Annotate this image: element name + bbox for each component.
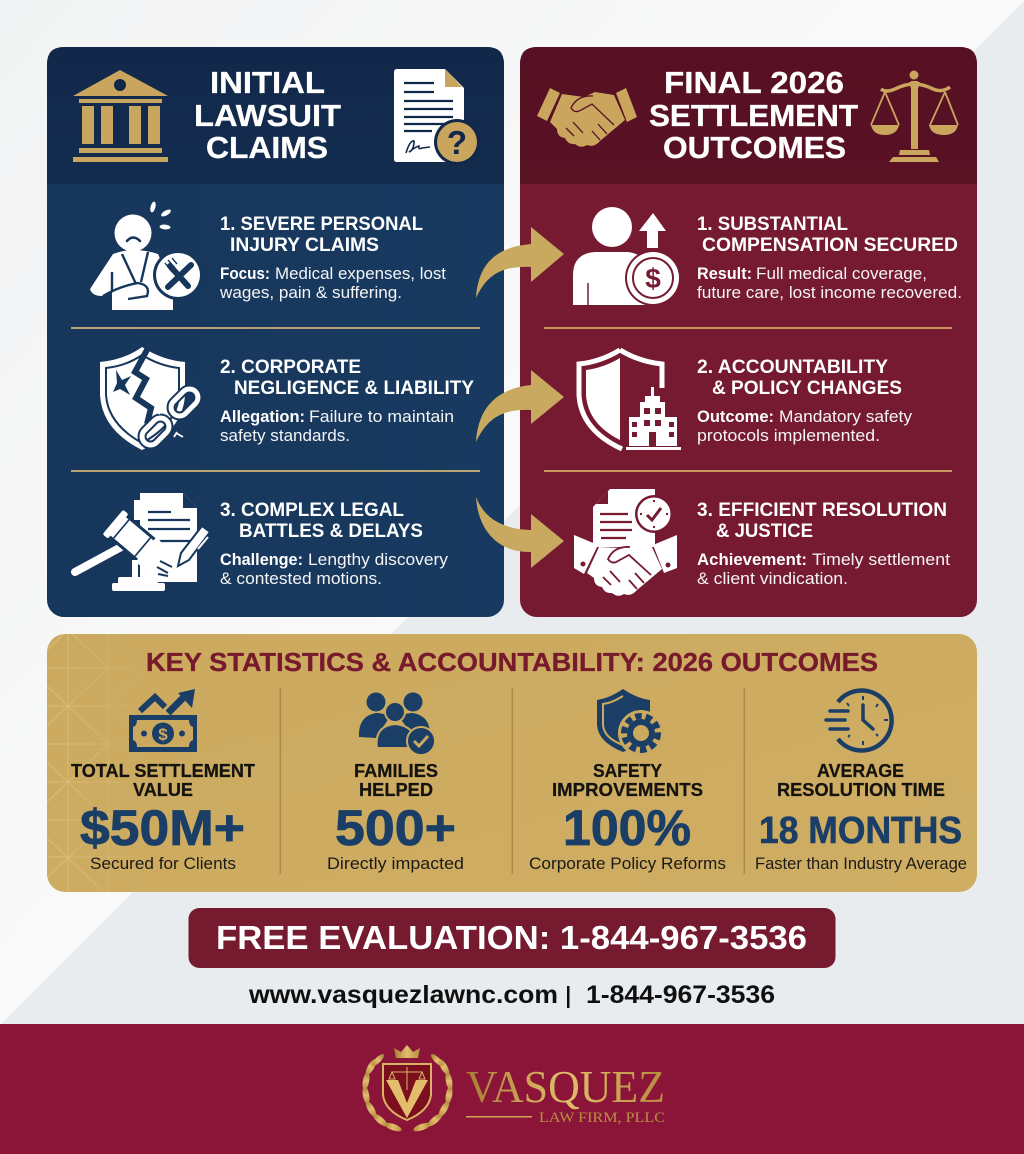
caption: Secured for Clients [90, 854, 236, 873]
icon: money with rising arrow: $ [158, 725, 168, 744]
icon: money with rising arrow [129, 689, 197, 752]
logo emblem [361, 1045, 454, 1133]
label: SAFETY [593, 760, 663, 781]
text: outcome 1 title [697, 214, 958, 256]
text: item 2 description: safety standards. [220, 427, 350, 445]
text: item 3 title: BATTLES & DELAYS [239, 521, 423, 542]
arrow: claim 2 to outcome 2 [476, 370, 564, 442]
label: TOTAL SETTLEMENT [71, 760, 256, 781]
heading: final 2026 settlement outcomes: OUTCOMES [663, 130, 846, 165]
label [354, 760, 438, 800]
icon: document with question mark [394, 69, 480, 165]
logo: vasquez law firm [361, 1045, 665, 1133]
caption: Corporate Policy Reforms [529, 854, 726, 873]
text: outcome 1 title: 1. SUBSTANTIAL [697, 214, 848, 235]
panel: initial lawsuit claims [47, 47, 504, 617]
text: outcome 3 title: & JUSTICE [716, 521, 813, 542]
text: item 3 description: & contested motions. [220, 570, 382, 588]
text: item 1 description: wages, pain & suffering. [219, 284, 402, 302]
stat: families helped [327, 692, 464, 873]
text: item 2 description: Allegation: [220, 408, 305, 426]
text: outcome 3 description: Achievement: [697, 551, 807, 569]
text: outcome 3 description: Timely settlement [812, 551, 950, 569]
text: outcome 1 description: Full medical coverage, [756, 265, 927, 283]
label [71, 760, 256, 800]
heading: key statistics: KEY STATISTICS & ACCOUNTABILITY: 2026 OUTCOMES [146, 647, 878, 677]
label [552, 760, 703, 800]
icon: document, clock and handshake [574, 489, 677, 596]
text: item 3 description: Lengthy discovery [308, 551, 449, 569]
text: item 2 description [220, 408, 454, 445]
text: outcome 1 description: future care, lost income recovered. [697, 284, 962, 302]
contact line: 1-844-967-3536 [586, 981, 775, 1009]
text: outcome 2 title: & POLICY CHANGES [712, 378, 902, 399]
heading: final 2026 settlement outcomes [649, 65, 858, 165]
heading: initial lawsuit claims: CLAIMS [206, 130, 328, 165]
heading: initial lawsuit claims: LAWSUIT [194, 98, 341, 133]
contact line [248, 981, 775, 1009]
panel: key statistics [28, 630, 977, 896]
icon: family with check [359, 692, 435, 755]
contact line: www.vasquezlawnc.com [248, 981, 558, 1009]
stat: safety improvements [529, 689, 726, 873]
item 1: substantial compensation secured [573, 207, 962, 306]
text: item 2 title [220, 357, 474, 399]
text: item 1 description: Focus: [220, 265, 270, 283]
text: outcome 1 title: COMPENSATION SECURED [702, 235, 958, 256]
icon: gold handshake [537, 88, 637, 147]
label: AVERAGE [817, 760, 904, 781]
caption: Faster than Industry Average [755, 854, 967, 873]
text: item 3 description: Challenge: [220, 551, 303, 569]
icon: shield and office building [579, 350, 681, 450]
text: outcome 2 description [697, 408, 913, 445]
item 2: accountability and policy changes [579, 350, 913, 450]
icon: shield and gear [597, 689, 664, 756]
item 3: complex legal battles and delays [75, 493, 449, 591]
text: item 1 description [219, 265, 446, 302]
text: item 1 title: INJURY CLAIMS [230, 235, 379, 256]
text: item 1 title [220, 214, 423, 256]
label: IMPROVEMENTS [552, 779, 703, 800]
icon: person with dollar coin and arrow: $ [645, 263, 661, 294]
arrow: claim 1 to outcome 1 [476, 227, 564, 298]
label: RESOLUTION TIME [777, 779, 945, 800]
panel: final 2026 settlement outcomes [520, 47, 977, 617]
heading: initial lawsuit claims: INITIAL [210, 65, 325, 100]
arrow: claim 3 to outcome 3 [476, 497, 564, 568]
item 1: severe personal injury claims [90, 201, 446, 310]
text: item 1 title: 1. SEVERE PERSONAL [220, 214, 423, 235]
heading: final 2026 settlement outcomes: FINAL 2026 [664, 65, 844, 100]
text: item 1 description: Medical expenses, lost [275, 265, 446, 283]
text: item 3 title [220, 500, 423, 542]
heading: final 2026 settlement outcomes: SETTLEMENT [649, 98, 858, 133]
text: outcome 2 title: 2. ACCOUNTABILITY [697, 357, 888, 378]
text: item 2 title: NEGLIGENCE & LIABILITY [234, 378, 474, 399]
text: outcome 2 description: protocols implemented. [697, 427, 880, 445]
icon: gavel, document and pen [75, 493, 210, 591]
text: item 2 title: 2. CORPORATE [220, 357, 361, 378]
icon: injured person [90, 201, 203, 310]
caption: Directly impacted [327, 854, 464, 873]
number: 18 MONTHS [759, 810, 962, 852]
text: outcome 2 description: Mandatory safety [779, 408, 913, 426]
call to action button [188, 908, 836, 968]
footer band [0, 1024, 1024, 1154]
icon: broken shield and chain [100, 347, 201, 450]
logo wordmark: LAW FIRM, PLLC [539, 1110, 665, 1126]
number: 100% [563, 800, 691, 856]
text: outcome 1 description: Result: [697, 265, 752, 283]
logo wordmark: VASQUEZ [466, 1062, 665, 1112]
item 3: efficient resolution and justice [574, 489, 950, 596]
icon: scales of justice [871, 70, 958, 162]
label: VALUE [133, 779, 193, 800]
stat: total settlement value [71, 689, 256, 873]
heading: initial lawsuit claims [194, 65, 341, 165]
call to action button: FREE EVALUATION: 1-844-967-3536 [216, 919, 807, 956]
number: $50M+ [80, 800, 245, 856]
label: FAMILIES [354, 760, 438, 781]
icon: courthouse [73, 70, 168, 162]
icon: person with dollar coin and arrow [573, 207, 681, 306]
text: outcome 3 description: & client vindication. [697, 570, 848, 588]
label [777, 760, 945, 800]
text: item 3 title: 3. COMPLEX LEGAL [220, 500, 404, 521]
text: outcome 3 title: 3. EFFICIENT RESOLUTION [697, 500, 947, 521]
text: item 2 description: Failure to maintain [309, 408, 454, 426]
text: outcome 2 description: Outcome: [697, 408, 774, 426]
icon: fast clock [826, 691, 892, 751]
text: outcome 2 title [697, 357, 902, 399]
stat: average resolution time [755, 691, 967, 873]
text: outcome 3 title [697, 500, 947, 542]
icon: document with question mark: ? [447, 124, 467, 161]
item 2: corporate negligence and liability [100, 347, 474, 450]
text: outcome 3 description [697, 551, 950, 588]
label: HELPED [359, 779, 433, 800]
text: outcome 1 description [697, 265, 962, 302]
text: item 3 description [220, 551, 449, 588]
number: 500+ [335, 800, 456, 856]
